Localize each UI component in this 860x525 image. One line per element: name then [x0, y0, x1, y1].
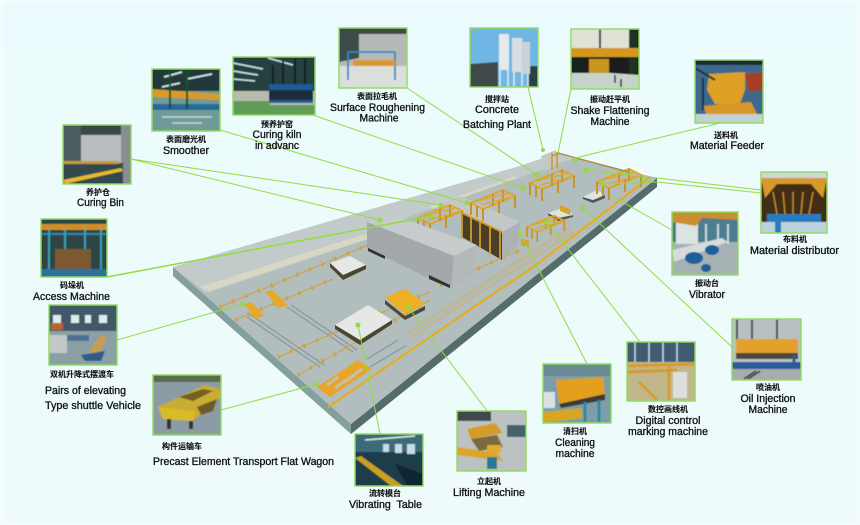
- label: Lifting Machine: [453, 487, 525, 499]
- label: 布料机: [783, 234, 807, 244]
- label: Pairs of elevating: [45, 385, 126, 397]
- photo: [695, 60, 763, 123]
- label: Vibrating Table: [349, 499, 422, 511]
- leader: shuttle vehicle: [117, 302, 246, 340]
- label: 送料机: [714, 130, 738, 140]
- label: 码垛机: [60, 280, 84, 290]
- label: Curing Bin: [77, 197, 124, 209]
- platform left side face: [173, 267, 351, 434]
- gantries on line: [471, 169, 641, 248]
- label: Machine: [590, 116, 630, 128]
- leader: surface roughening: [407, 88, 540, 178]
- yellow transfer carts: [245, 290, 288, 319]
- leader: vibrator: [610, 195, 672, 230]
- label: 养护仓: [86, 187, 110, 197]
- label: [570, 94, 650, 128]
- label: [690, 130, 764, 152]
- callout: vibrating table: [349, 434, 423, 511]
- label: Cleaning: [555, 437, 595, 449]
- photo: [732, 319, 801, 380]
- beige lane stripes: [200, 176, 517, 292]
- leader: oil injection: [580, 206, 732, 347]
- label: [330, 91, 425, 124]
- leader: digital control: [544, 220, 640, 342]
- big yellow transport cart: [385, 289, 425, 320]
- label: [689, 278, 725, 301]
- label: 立起机: [477, 476, 501, 486]
- platform top surface: [173, 153, 657, 424]
- callout: oil injection machine: [732, 319, 801, 416]
- leader: material distributor: [582, 168, 761, 193]
- concrete pallets: [330, 190, 605, 345]
- callout: curing bin: [63, 125, 131, 209]
- platform right side face: [351, 178, 657, 434]
- label: 预养护窑: [261, 119, 293, 129]
- curing bin second building: [440, 196, 520, 260]
- conveyor rows of supports: [220, 240, 520, 375]
- curing kiln building: [367, 213, 477, 289]
- label: Access Machine: [33, 291, 110, 303]
- concrete batching plant building: [541, 150, 628, 172]
- leader: smoother: [220, 130, 470, 206]
- label: Vibrator: [689, 289, 725, 301]
- leader: cleaning machine: [518, 230, 587, 364]
- photo: [672, 212, 738, 275]
- label: Precast Element Transport Flat Wagon: [153, 456, 334, 468]
- leader: curing kiln: [313, 115, 526, 190]
- label: 数控画线机: [648, 404, 688, 414]
- callout: digital control marking machine: [627, 342, 708, 438]
- photo: [761, 172, 827, 233]
- factory floor platform: [173, 150, 657, 434]
- callout: concrete batching plant: [463, 28, 538, 131]
- label: [349, 488, 422, 511]
- label: Surface Roughening: [330, 102, 425, 114]
- label: Oil Injection: [740, 393, 796, 405]
- photo: [571, 29, 639, 89]
- back service lane: [173, 153, 575, 292]
- label: [453, 476, 525, 499]
- label: Shake Flattening: [570, 105, 650, 117]
- label: Curing kiln: [252, 129, 302, 141]
- photo: [627, 342, 695, 401]
- label: Smoother: [163, 145, 209, 157]
- label: 振动台: [695, 278, 719, 288]
- leader lines: [107, 87, 761, 434]
- label: 喷油机: [756, 382, 780, 392]
- label: 表面拉毛机: [357, 91, 397, 101]
- callout: material feeder: [690, 60, 764, 152]
- label: Digital control: [636, 415, 700, 427]
- label: 双机升降式摆渡车: [50, 369, 114, 379]
- label: [153, 441, 334, 468]
- label: [252, 119, 302, 152]
- callout: curing kiln: [233, 57, 315, 152]
- label: marking machine: [628, 426, 708, 438]
- label: Batching Plant: [463, 119, 531, 131]
- tan rack structure: [408, 227, 574, 337]
- label: 流转模台: [369, 488, 401, 498]
- gantry: left of bin: [418, 205, 462, 236]
- leader: curing bin: [131, 159, 444, 222]
- label: [45, 369, 141, 412]
- label: [463, 94, 531, 131]
- leader: access machine: [107, 214, 434, 277]
- photo: [152, 69, 220, 131]
- callout: pairs of elevating type shuttle vehicle: [45, 305, 141, 412]
- callout: cleaning machine: [543, 364, 611, 460]
- photo: [355, 434, 423, 486]
- label: [628, 404, 708, 438]
- callout: lifting machine: [453, 411, 526, 499]
- photo: [543, 364, 611, 423]
- label: 清扫机: [563, 426, 587, 436]
- photo: [233, 57, 315, 115]
- long yellow beam: [328, 177, 650, 407]
- label: [740, 382, 796, 416]
- photo: [339, 28, 407, 88]
- label: [33, 280, 110, 303]
- label: 搅拌站: [485, 94, 509, 104]
- leader: transport wagon: [221, 382, 319, 410]
- label: in advanc: [255, 140, 300, 152]
- label: Type shuttle Vehicle: [45, 400, 141, 412]
- label: [750, 234, 839, 257]
- photo: [49, 305, 117, 365]
- leader: lifting machine: [406, 304, 488, 412]
- callout: vibrator: [672, 212, 738, 301]
- label: Machine: [748, 404, 788, 416]
- label: Concrete: [475, 104, 519, 116]
- label: Material Feeder: [690, 140, 764, 152]
- leader: shake flattening: [558, 89, 571, 153]
- callout: surface roughening machine: [330, 28, 425, 124]
- label: [555, 426, 595, 460]
- photo: [41, 219, 107, 277]
- callout: precast element transport flat wagon: [153, 375, 334, 468]
- photo: [153, 375, 221, 435]
- callout: smoother: [152, 69, 220, 157]
- label: Machine: [360, 112, 398, 124]
- label: [77, 187, 124, 209]
- floor rails: [247, 305, 407, 367]
- callout: access machine: [33, 219, 110, 303]
- label: [163, 134, 209, 157]
- callout: shake flattening machine: [570, 29, 650, 128]
- label: Material distributor: [750, 245, 839, 257]
- label: machine: [556, 448, 594, 460]
- photo: [457, 411, 526, 471]
- yellow grid wagon: [317, 360, 372, 397]
- leader: concrete batching: [528, 87, 545, 152]
- callout: material distributor: [750, 172, 839, 257]
- label: 构件运输车: [162, 441, 202, 451]
- label: 表面磨光机: [166, 134, 206, 144]
- label: 振动赶平机: [590, 94, 630, 104]
- leader: material feeder: [572, 123, 720, 162]
- leader: vibrating table: [356, 322, 380, 434]
- photo: [63, 125, 131, 184]
- photo: [470, 28, 538, 87]
